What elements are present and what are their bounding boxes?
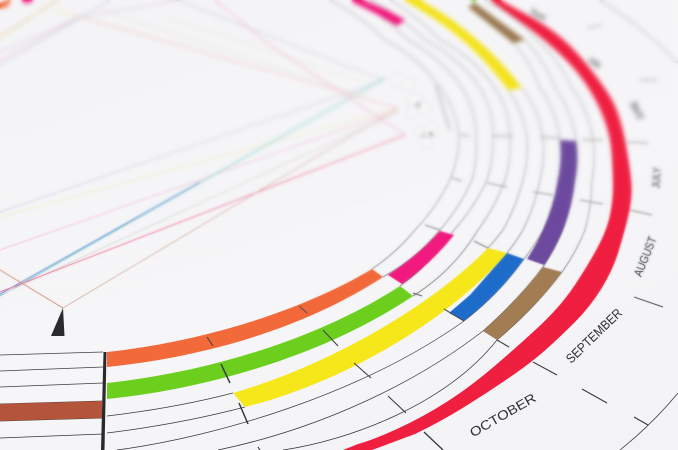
label: May: MAY xyxy=(586,55,602,70)
node dots xyxy=(416,104,432,136)
band: brown left xyxy=(0,401,102,421)
node caption stroke xyxy=(436,86,450,130)
node clusters xyxy=(391,73,438,149)
band: top pink xyxy=(352,0,405,26)
pointer triangle xyxy=(51,308,64,336)
band: pink xyxy=(388,231,454,284)
label: August: AUGUST xyxy=(631,234,660,279)
connecting strings xyxy=(0,0,405,308)
band: red outer ring xyxy=(343,0,632,450)
band: top brown xyxy=(468,3,525,43)
label: September: SEPTEMBER xyxy=(563,305,625,366)
band: purple xyxy=(527,140,577,265)
band: brown right xyxy=(483,267,562,340)
top-left orange mark xyxy=(0,0,11,9)
tick marks xyxy=(207,25,663,450)
top-left magenta mark xyxy=(21,0,34,3)
month labels xyxy=(467,6,664,440)
band: green xyxy=(107,286,413,399)
axis bar xyxy=(101,352,106,450)
band: orange xyxy=(107,269,383,367)
band: top yellow xyxy=(403,0,522,90)
band: yellow lower xyxy=(233,248,507,407)
band: blue xyxy=(449,253,524,321)
label: June: JUNE xyxy=(628,99,647,122)
small green band end xyxy=(470,0,477,3)
label: October: OCTOBER xyxy=(467,390,539,440)
label: July: JULY xyxy=(650,167,664,189)
label: April: APRIL xyxy=(527,6,548,23)
